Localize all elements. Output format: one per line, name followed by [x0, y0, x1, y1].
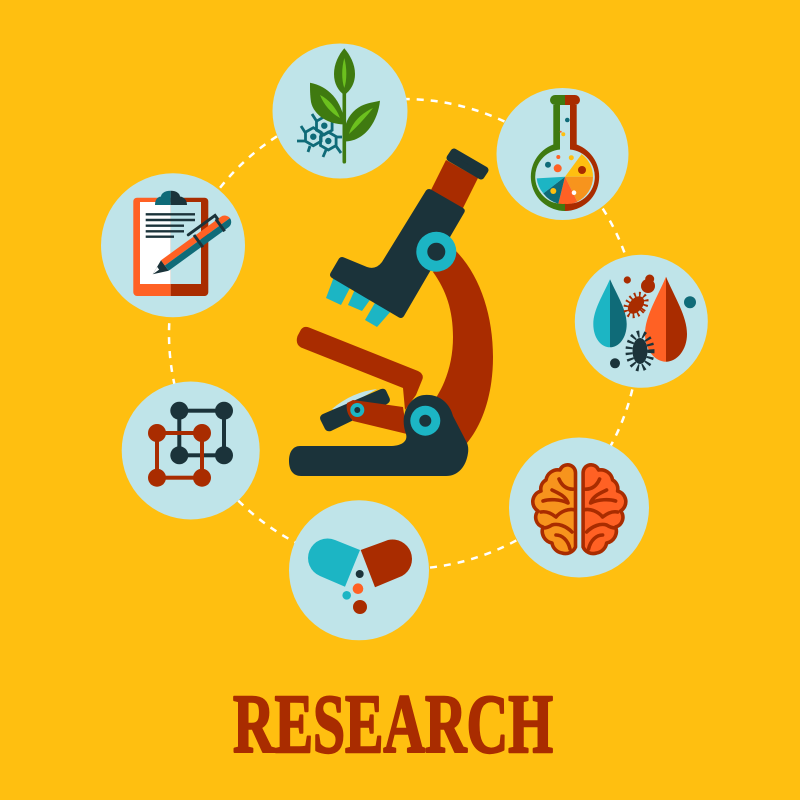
- stage: [297, 327, 423, 410]
- icon: clipboard board: [133, 191, 208, 296]
- panel: flask: [496, 88, 628, 220]
- objective lenses: [326, 274, 392, 327]
- icon: red bacterium: [622, 290, 650, 320]
- tube: [430, 160, 478, 210]
- panel: molecular cubes: [122, 382, 260, 520]
- icon: capsule teal half: [308, 539, 360, 587]
- panel: plant and molecule: [272, 44, 408, 178]
- icon: flask bubbles: [545, 118, 586, 195]
- panel: pill: [289, 500, 429, 640]
- icon: molecule hexagons: [297, 114, 342, 157]
- icon: dark lattice: [170, 402, 233, 464]
- microscope: [289, 152, 493, 476]
- icon: pill granules: [342, 570, 367, 614]
- focus knob: [416, 232, 456, 272]
- icon: specks: [610, 274, 696, 368]
- icon: capsule red half: [361, 539, 412, 587]
- panel: brain: [509, 438, 649, 578]
- text block: clipboard lines: [146, 214, 195, 237]
- panel: drops and bacteria: [575, 255, 708, 388]
- arm: [433, 250, 493, 443]
- base: [289, 395, 468, 476]
- title: RESEARCH: [233, 678, 553, 771]
- icon: flask outline: [531, 95, 599, 211]
- icon: right hemisphere: [583, 465, 626, 554]
- eyepiece cap: [450, 152, 485, 176]
- icon: flask pie contents: [537, 154, 593, 205]
- icon: left hemisphere: [533, 465, 576, 554]
- icon: dark bacterium: [629, 334, 651, 368]
- icon: red drop: [645, 277, 687, 362]
- icon: pen: [146, 209, 234, 280]
- focus wheel: [410, 406, 440, 436]
- icon: red lattice: [148, 424, 211, 487]
- mirror: [320, 389, 407, 434]
- icon: teal drop: [593, 279, 627, 347]
- panel: clipboard: [101, 173, 245, 317]
- microscope head: [330, 189, 465, 318]
- icon: plant leaves: [310, 48, 380, 162]
